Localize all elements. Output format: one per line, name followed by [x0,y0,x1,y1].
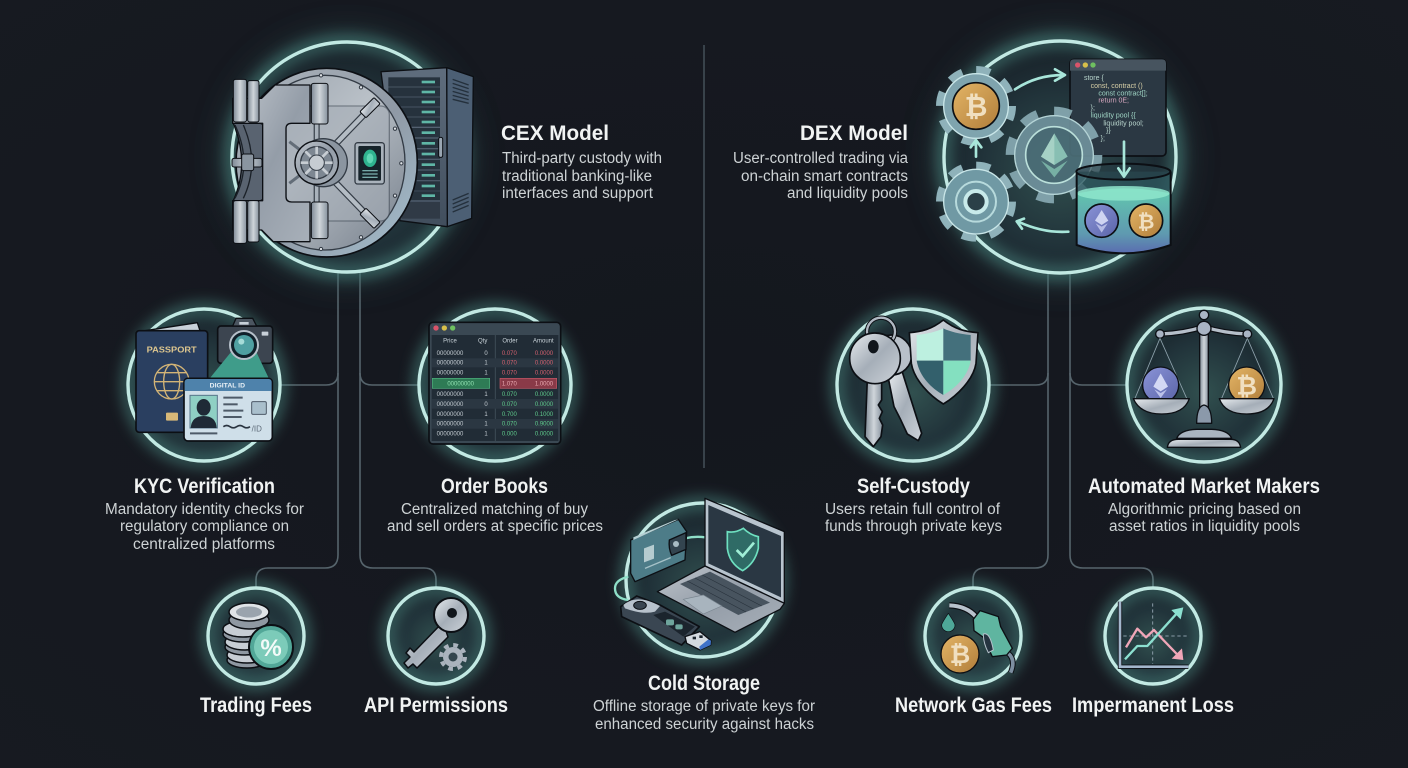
smart contract window: }; [1091,105,1095,112]
icon: order book table: 0.0000 [535,361,554,367]
text: Order Books description: Centralized matching of buy [401,501,588,518]
icon: order book table: 00000000 [437,402,464,408]
panel: DEX Model [733,27,1190,287]
text: Self-Custody description: Users retain full control of [825,501,1001,518]
text: Order Books description [387,501,603,535]
icon: order book table: 1.070 [502,381,517,387]
icon: order book table: 1 [484,422,488,428]
smart contract window: const contract[]; [1098,91,1148,98]
icon: order book table: 00000000 [447,381,475,387]
text: KYC description: regulatory compliance on [120,518,289,535]
vault door [232,68,417,257]
panel: Self-Custody [825,309,1002,535]
text: Cold Storage description [593,698,815,733]
label: API Permissions: API Permissions [364,694,508,717]
icon: order book table: Amount [533,339,554,345]
text: CEX description [502,150,662,202]
liquidity pool tank: ₿ [1138,210,1154,234]
icon: order book table: 0 [484,402,488,408]
text: Self-Custody description: funds through private keys [825,518,1002,535]
connector lines: CEX [256,272,436,590]
icon: order book table: 0.070 [502,351,517,357]
text: Self-Custody description [825,501,1002,535]
icon: order book table: 0.1000 [535,412,554,418]
icon: divergence chart [1120,602,1188,667]
icon: order book table: 1 [484,392,488,398]
smart contract window: }} [1106,128,1111,135]
icon: vault door and server rack [232,68,473,257]
gear: settings [940,166,1012,237]
icon: order book table: 0.000 [502,432,517,438]
text: CEX description: Third-party custody with [502,150,662,167]
gear: ethereum [1011,112,1097,198]
smart contract window: store { [1084,75,1104,82]
icon: order book table: 00000000 [437,392,464,398]
icon: order book table: 1 [484,432,488,438]
icon: order book table: 00000000 [437,351,464,357]
panel: CEX Model [219,29,662,285]
icon: passport, camera and digital ID: PASSPORT [147,345,197,355]
text: DEX description: on-chain smart contracts [741,168,908,185]
text: CEX description: traditional banking-like [502,168,652,185]
icon: order book table: 0.700 [502,412,517,418]
text: DEX description [733,150,908,202]
icon: order book table: 00000000 [437,412,464,418]
center divider [703,45,705,468]
icon: fuel nozzle with coin [941,605,1013,673]
text: KYC description: centralized platforms [133,536,275,553]
text: Order Books description: and sell orders at specific prices [387,518,603,535]
icon: order book table: 0.0000 [535,432,554,438]
icon: order book table: 0.070 [502,392,517,398]
text: AMM description: Algorithmic pricing based on [1108,501,1301,518]
label: Impermanent Loss: Impermanent Loss [1072,694,1234,717]
icon: order book table: 1.0000 [535,381,554,387]
icon: order book table: 0.0000 [535,402,554,408]
icon: order book table [429,322,561,444]
icon: order book table: 0.070 [502,371,517,377]
heading: Automated Market Makers: Automated Market Makers [1088,475,1320,498]
icon: keys and shield [850,318,978,447]
icon: order book table: 0.070 [502,361,517,367]
icon: order book table: 0.070 [502,422,517,428]
text: Cold Storage description: Offline storage of private keys for [593,698,815,715]
icon: order book table: 1 [484,361,488,367]
icon: order book table: 0.0000 [535,392,554,398]
icon: balance scale with coins: ₿ [1236,370,1257,400]
icon: order book table: 0.0000 [535,351,554,357]
icon: gears, smart contract and liquidity pool [940,59,1171,253]
text: AMM description: asset ratios in liquidity pools [1109,518,1300,535]
icon: order book table: 00000000 [437,361,464,367]
gear: bitcoin [940,70,1012,142]
arrows: flow between components [971,69,1130,232]
heading: Order Books: Order Books [441,475,548,498]
icon: order book table: 1 [484,412,488,418]
panel: Trading Fees [200,588,312,717]
icon: passport, camera and digital ID: DIGITAL ID [210,382,245,389]
label: Network Gas Fees: Network Gas Fees [895,694,1052,717]
icon: coin stack with percent badge: % [260,635,282,662]
liquidity pool tank [1076,164,1171,253]
smart contract window [1070,59,1166,156]
heading: KYC Verification: KYC Verification [134,475,275,498]
panel: API Permissions [364,588,508,717]
icon: order book table: 00000000 [437,432,464,438]
icon: passport, camera and digital ID [136,318,273,441]
icon: order book table: Qty [478,339,487,345]
text: KYC description: Mandatory identity checks for [105,501,304,518]
icon: order book table: 0.0000 [535,371,554,377]
icon: order book table: 00000000 [437,422,464,428]
panel: Impermanent Loss [1072,588,1234,717]
text: Cold Storage description: enhanced security against hacks [595,716,814,733]
icon: order book table: 0.070 [502,402,517,408]
panel: Cold Storage [593,498,815,733]
icon: order book table: 0.9000 [535,422,554,428]
panel: KYC Verification [105,309,304,553]
text: KYC description [105,501,304,553]
smart contract window: return 0E; [1098,98,1129,105]
label: Trading Fees: Trading Fees [200,694,312,717]
icon: balance scale with coins [1133,310,1274,447]
heading: Self-Custody: Self-Custody [857,475,970,498]
icon: laptop, wallet and hardware key [615,498,784,650]
icon: order book table: 0 [484,351,488,357]
heading: Cold Storage: Cold Storage [648,672,760,695]
icon: order book table: Order [502,339,518,345]
panel: Automated Market Makers [1088,308,1320,535]
text: DEX description: and liquidity pools [787,185,908,202]
text: CEX description: interfaces and support [502,185,654,202]
icon: passport, camera and digital ID: /ID [252,425,262,434]
panel: Order Books [387,309,603,535]
icon: order book table: 00000000 [437,371,464,377]
connector lines: DEX [973,272,1153,590]
text: DEX description: User-controlled trading via [733,150,908,167]
panel: Network Gas Fees [895,588,1052,717]
icon: order book table: Price [443,339,457,345]
smart contract window: }; [1101,136,1105,143]
smart contract window: liquidity pool {{ [1091,112,1136,119]
heading: CEX Model: CEX Model [501,122,609,145]
text: AMM description [1108,501,1301,535]
gear: bitcoin: ₿ [965,90,987,123]
heading: DEX Model: DEX Model [800,122,908,145]
smart contract window: const, contract () [1091,83,1143,90]
icon: fuel nozzle with coin: ₿ [950,639,970,669]
icon: order book table: 1 [484,371,488,377]
smart contract window: liquidity pool; [1103,120,1144,127]
icon: key with gear [404,598,468,669]
